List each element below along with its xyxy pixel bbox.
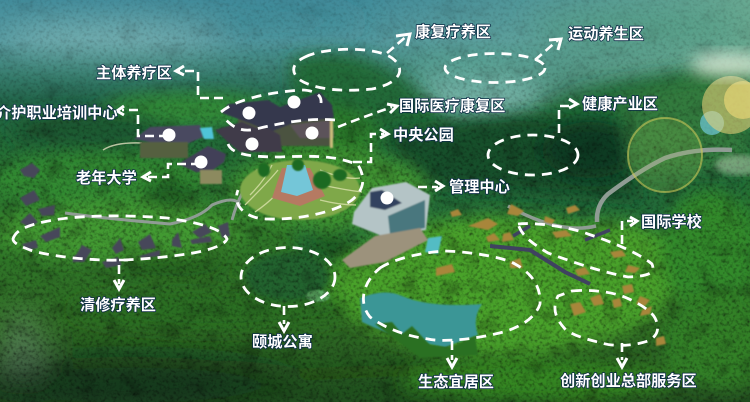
connector arrow bbox=[535, 40, 558, 60]
callout: 中央公园 bbox=[228, 127, 454, 219]
label: 颐城公寓 bbox=[252, 333, 313, 351]
connector arrow bbox=[283, 306, 285, 324]
label: 中央公园 bbox=[393, 127, 454, 144]
label: 主体养疗区 bbox=[96, 64, 172, 82]
zone outline bbox=[445, 54, 545, 82]
label: 康复疗养区 bbox=[415, 23, 491, 41]
label: 健康产业区 bbox=[582, 95, 658, 113]
label: 国际学校 bbox=[641, 213, 702, 231]
village paths bbox=[490, 246, 590, 284]
label: 运动养生区 bbox=[568, 25, 644, 43]
callout: 国际医疗康复区 bbox=[221, 90, 505, 130]
label: 创新创业总部服务区 bbox=[560, 372, 697, 390]
connector arrow bbox=[387, 35, 408, 53]
pond bbox=[360, 292, 482, 347]
zone outline bbox=[228, 144, 363, 219]
callout: 主体养疗区 bbox=[96, 64, 223, 98]
callout: 管理中心 bbox=[418, 178, 510, 196]
palms over terraces bbox=[258, 159, 347, 189]
callout: 生态宜居区 bbox=[363, 251, 540, 391]
connector arrow bbox=[338, 107, 392, 127]
callout: 清修疗养区 bbox=[13, 216, 227, 314]
label: 国际医疗康复区 bbox=[399, 97, 505, 115]
buildings bbox=[20, 92, 442, 268]
connector arrow bbox=[353, 134, 384, 162]
connector arrow bbox=[119, 260, 128, 284]
callout: 运动养生区 bbox=[445, 25, 644, 82]
lens flare bbox=[628, 53, 750, 192]
label: 生态宜居区 bbox=[418, 373, 494, 391]
connector arrow bbox=[122, 110, 168, 136]
village huts bbox=[436, 204, 666, 346]
connector arrow bbox=[621, 343, 623, 360]
callout: 国际学校 bbox=[518, 213, 702, 277]
zone outline bbox=[555, 290, 658, 345]
zone outline bbox=[488, 135, 578, 175]
label: 清修疗养区 bbox=[80, 296, 156, 314]
callout: 老年大学 bbox=[76, 164, 200, 187]
zone outline bbox=[518, 224, 653, 277]
label: 管理中心 bbox=[449, 178, 510, 196]
label: 老年大学 bbox=[76, 169, 137, 187]
zone outline bbox=[363, 251, 540, 340]
callout: 介护职业培训中心 bbox=[0, 104, 168, 136]
callout: 康复疗养区 bbox=[294, 23, 491, 90]
zone outline bbox=[294, 49, 400, 90]
location dots bbox=[162, 96, 394, 204]
callout: 颐城公寓 bbox=[241, 248, 335, 351]
connector arrow bbox=[418, 186, 438, 188]
connector arrow bbox=[148, 164, 200, 177]
zone outline bbox=[241, 248, 335, 306]
roads bbox=[65, 143, 732, 228]
central terraces bbox=[240, 160, 360, 220]
connector arrow bbox=[451, 341, 453, 360]
connector arrow bbox=[559, 106, 572, 133]
connector arrow bbox=[178, 71, 223, 98]
connector arrow bbox=[622, 221, 633, 244]
callout: 创新创业总部服务区 bbox=[555, 290, 697, 390]
zone outline bbox=[13, 216, 227, 260]
zone outline: main building group bbox=[221, 90, 335, 130]
right hill bbox=[290, 53, 750, 260]
callout: 健康产业区 bbox=[488, 95, 658, 175]
